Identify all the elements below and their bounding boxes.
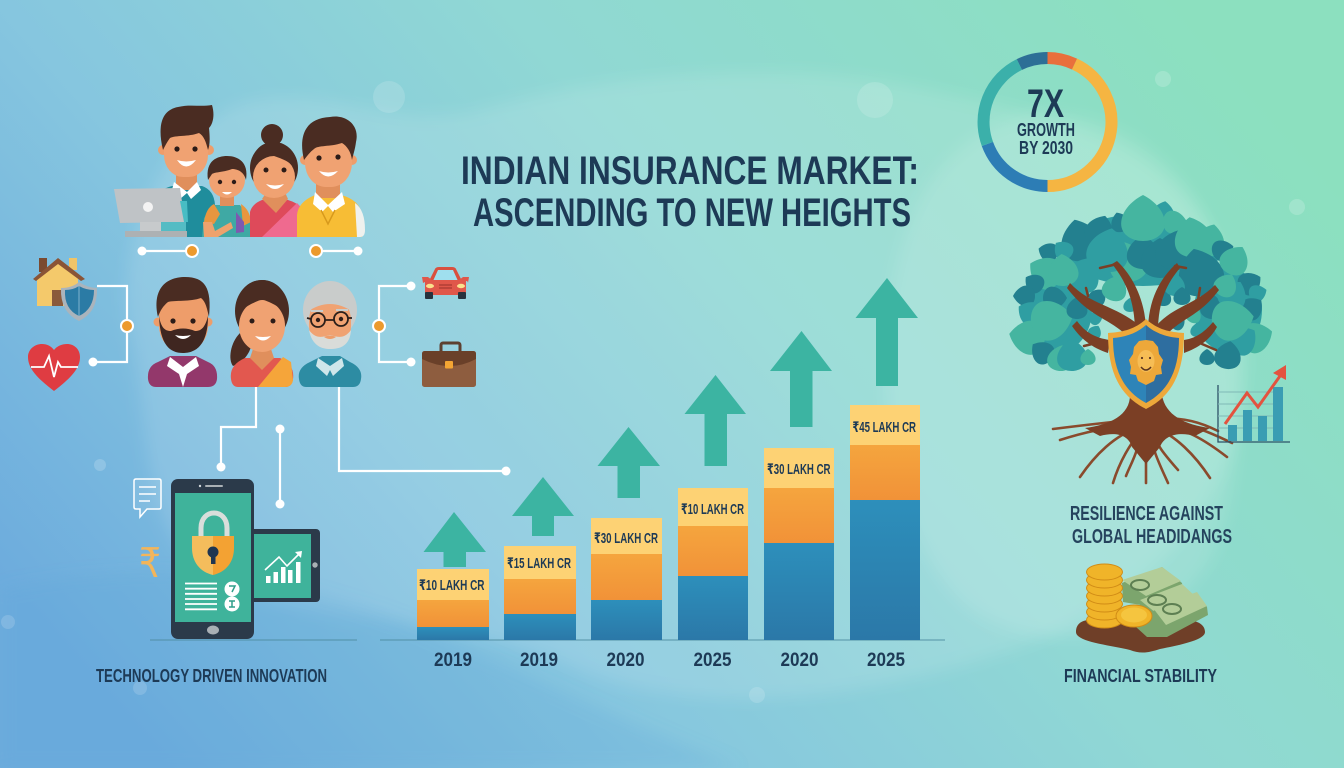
person: bearded man — [148, 277, 217, 387]
label: financial stability: FINANCIAL STABILITY — [1064, 666, 1217, 686]
icon: car — [422, 267, 469, 299]
bar 2019 second — [504, 546, 576, 671]
bar 2025: ₹10 LAKH CR — [681, 502, 744, 518]
mini growth chart — [1218, 365, 1290, 442]
bar 2019 — [417, 569, 489, 671]
donut: 7X growth by 2030: BY 2030 — [1019, 138, 1073, 158]
title: ASCENDING TO NEW HEIGHTS — [473, 191, 911, 235]
donut: 7X growth by 2030: 7X — [1027, 82, 1064, 126]
bar 2025 second: ₹45 LAKH CR — [852, 420, 916, 436]
label: resilience: GLOBAL HEADIDANGS — [1072, 526, 1232, 548]
bar 2025 — [678, 488, 748, 671]
arrow 4 — [684, 375, 746, 466]
chart baseline — [150, 639, 945, 641]
bar 2019 second: 2019 — [520, 650, 558, 671]
arrow 1 — [424, 512, 486, 567]
title: INDIAN INSURANCE MARKET: — [461, 149, 919, 193]
arrow 2 — [512, 477, 574, 536]
icon: house with shield — [33, 258, 97, 321]
arrow 6 — [856, 278, 918, 386]
bar 2020 second: 2020 — [780, 650, 818, 671]
bar 2020 second — [764, 448, 834, 671]
arrow 3 — [598, 427, 660, 498]
person: woman in sari — [230, 280, 293, 387]
bar 2019: ₹10 LAKH CR — [419, 578, 485, 594]
icon: chat bubble — [134, 479, 161, 517]
family group with laptop — [114, 105, 365, 237]
bar chart — [417, 278, 920, 671]
bar 2025: 2025 — [694, 650, 732, 671]
tree trunk — [1085, 395, 1210, 464]
donut: 7X growth by 2030: GROWTH — [1017, 120, 1075, 140]
tree with lion shield — [1006, 195, 1290, 483]
bar 2025 second — [850, 405, 920, 671]
person: elderly man — [299, 281, 361, 387]
bar 2020: 2020 — [606, 650, 644, 671]
person: father — [155, 105, 215, 237]
tree branches — [1067, 261, 1219, 353]
laptop — [114, 188, 188, 237]
tree canopy — [1006, 195, 1277, 373]
icon: coins and cash — [1076, 564, 1208, 653]
bar 2020 second: ₹30 LAKH CR — [767, 462, 831, 478]
donut: 7X growth by 2030 — [984, 58, 1111, 186]
label: technology driven innovation: TECHNOLOGY DRIVEN INNOVATION — [96, 666, 327, 686]
label: resilience — [1070, 503, 1232, 548]
icon: rupee: ₹ — [139, 539, 161, 587]
bar 2025 second: 2025 — [867, 650, 905, 671]
arrow 5 — [770, 331, 832, 427]
smartphone with lock — [171, 479, 320, 639]
bar 2019: 2019 — [434, 650, 472, 671]
icon: heart with pulse — [28, 344, 80, 391]
title — [461, 149, 919, 235]
person: child — [202, 156, 251, 237]
bar 2020 — [591, 518, 662, 671]
person: mother — [250, 124, 307, 237]
connector lines — [88, 245, 510, 508]
tree roots — [1053, 418, 1232, 483]
lock icon — [192, 513, 234, 575]
shield with lion — [1108, 319, 1184, 409]
phone body — [171, 479, 254, 639]
icon: briefcase — [422, 343, 476, 387]
bar 2019 second: ₹15 LAKH CR — [507, 556, 571, 572]
tablet — [250, 529, 320, 602]
bar 2020: ₹30 LAKH CR — [594, 531, 658, 547]
label: resilience: RESILIENCE AGAINST — [1070, 503, 1223, 525]
person: son — [297, 117, 365, 237]
